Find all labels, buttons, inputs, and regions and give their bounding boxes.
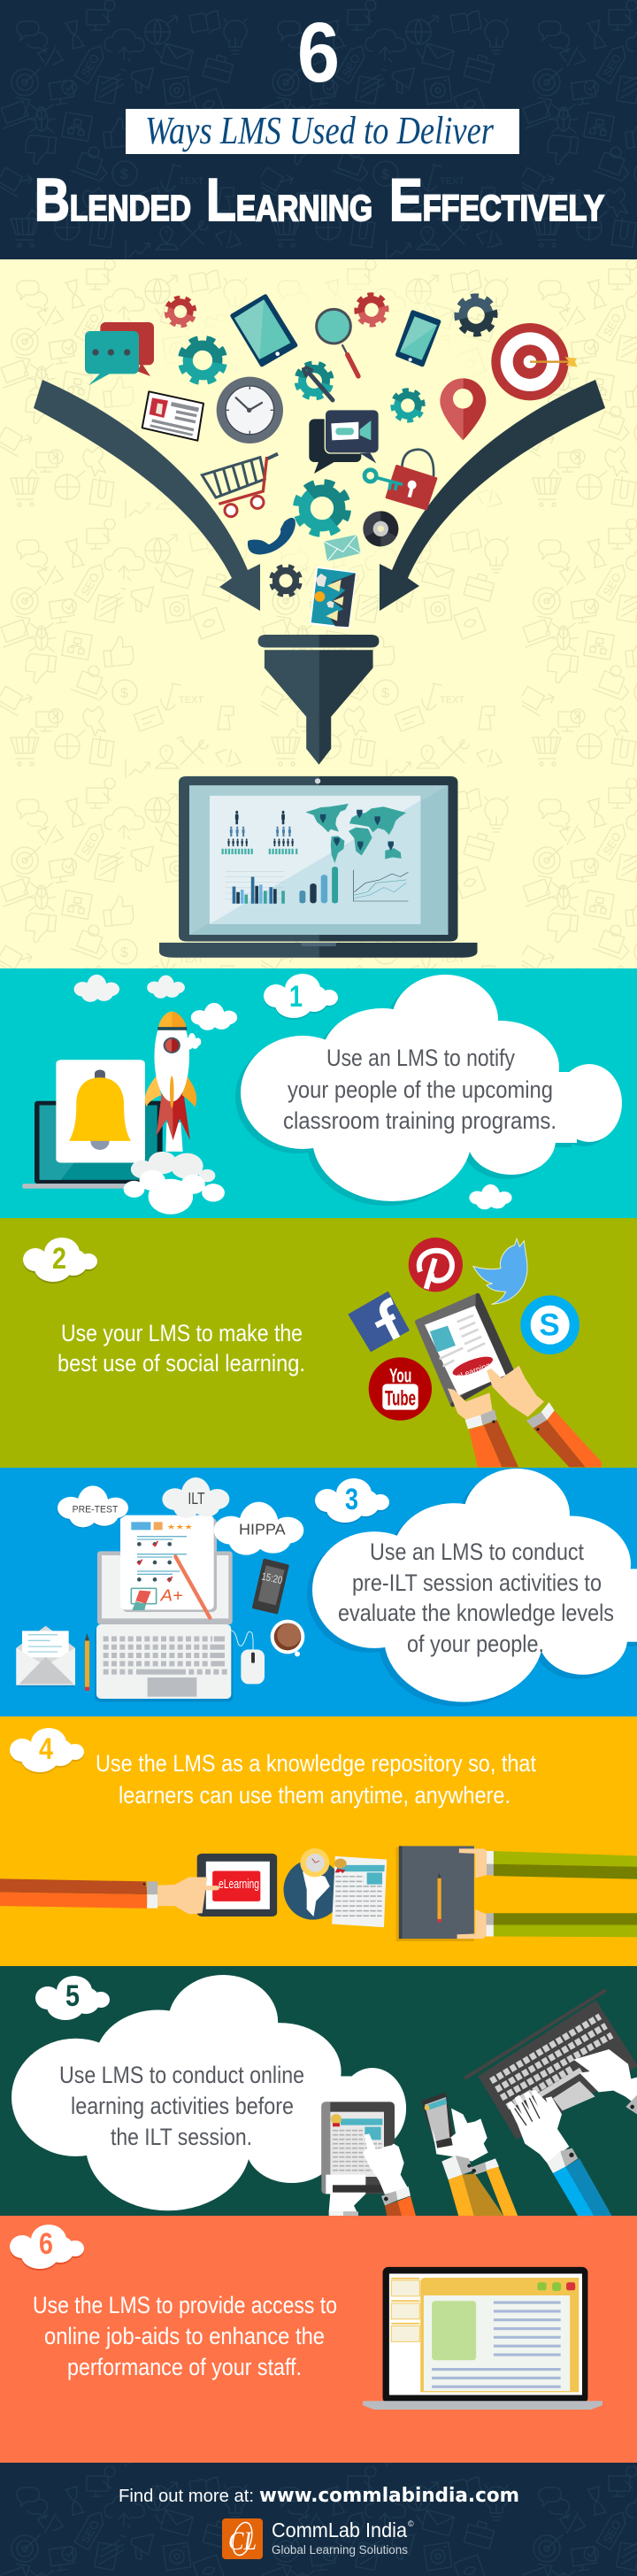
icon: large teal gear — [293, 479, 351, 537]
badge: number 3: 3 — [345, 1483, 358, 1516]
footer panel — [0, 2463, 637, 2576]
arrow: left curved arrow — [34, 380, 260, 611]
icon: video chat — [309, 410, 379, 474]
illustration: social media and tablet — [349, 1238, 602, 1467]
cloud: HIPPA tag — [214, 1502, 303, 1555]
logo: CommLab India mark: CL — [228, 2526, 257, 2556]
header panel — [0, 0, 637, 259]
icon: small dark gear — [269, 564, 303, 598]
cloud: ILT tag — [162, 1477, 229, 1518]
icon: pencil — [85, 1633, 89, 1691]
icon: dark gear top — [453, 292, 499, 338]
icon: Skype — [520, 1295, 579, 1354]
badge: number 1 — [264, 974, 338, 1020]
panel: funnel illustration — [0, 259, 637, 969]
icon: Skype: S — [539, 1307, 560, 1342]
panel: section 6 — [0, 2216, 637, 2463]
icon: teal gear with wrench — [293, 359, 335, 402]
panel: section 2 — [0, 1218, 637, 1468]
cloud: section 3 callout: of your people. — [407, 1631, 544, 1657]
subtitle banner: Ways LMS Used to Deliver — [145, 109, 495, 152]
illustration: phone and hands — [422, 2094, 518, 2216]
logo: CommLab India mark — [222, 2518, 263, 2559]
icon: smartphone — [397, 312, 439, 365]
icon: globe — [284, 1848, 342, 1920]
cloud: section 1 callout: Use an LMS to notify — [326, 1045, 515, 1071]
icons right cluster — [309, 309, 578, 561]
icon: red gear left — [165, 296, 196, 328]
icon: document — [332, 1856, 387, 1927]
badge: number 2: 2 — [52, 1242, 66, 1276]
icon: teal gear left — [178, 335, 227, 385]
chart: people pyramids — [223, 811, 296, 854]
panel: section 5 — [0, 1966, 637, 2216]
text: section 2: best use of social learning. — [58, 1350, 305, 1377]
cloud: section 3 callout — [307, 1469, 637, 1707]
icon: picture card — [310, 567, 357, 629]
illustration: laptop keyboard and hands — [466, 1991, 637, 2216]
icon: target with arrow — [491, 323, 578, 400]
cloud: section 3 callout: pre-ILT session activities to — [352, 1570, 602, 1596]
icon: shopping cart — [202, 454, 278, 517]
text: section 4: Use the LMS as a knowledge repository so, that — [96, 1750, 536, 1777]
icon: mouse — [231, 1631, 265, 1684]
funnel area icons — [159, 518, 478, 958]
cloud: section 1 callout: classroom training programs. — [283, 1107, 556, 1134]
title: Blended Learning Effectively: EFFECTIVELY — [389, 166, 604, 234]
chart: capsule bars — [299, 867, 338, 903]
cloud: section 1 callout — [235, 975, 622, 1206]
text: section 2: Use your LMS to make the — [61, 1320, 303, 1346]
cloud: section 1 callout: your people of the upcoming — [288, 1076, 553, 1103]
icon: map pin — [440, 378, 486, 440]
arm: top right hand — [459, 1848, 637, 1879]
cloud: section 3 callout: Use an LMS to conduct — [370, 1539, 584, 1565]
icon: hand held tablet — [418, 1295, 511, 1405]
icon: envelope and letter — [16, 1626, 75, 1687]
badge: number 5: 5 — [65, 1979, 80, 2013]
footer: find out more line: www.commlabindia.com — [259, 2485, 519, 2507]
icon: Twitter bird — [473, 1238, 527, 1304]
arm: bottom right hand — [457, 1909, 637, 1939]
icon: small teal gear — [390, 388, 426, 423]
badge: number 5 — [35, 1976, 110, 2020]
text: section 6: online job-aids to enhance the — [44, 2323, 325, 2349]
icon: notebook and pencil — [396, 1846, 474, 1941]
title: Blended Learning Effectively: BLENDED — [35, 166, 191, 234]
cloud: ILT tag: ILT — [188, 1489, 205, 1508]
footer: find out more line — [119, 2485, 519, 2507]
chart: world map with pins — [305, 804, 406, 863]
title: Blended Learning Effectively: LEARNING — [206, 166, 372, 234]
cloud: PRE-TEST tag: PRE-TEST — [73, 1504, 118, 1515]
laptop with dashboard — [159, 776, 478, 958]
arrow: right curved arrow — [380, 380, 605, 611]
icon: smartphone with time: 15:20 — [260, 1570, 284, 1586]
icon: YouTube — [369, 1357, 432, 1421]
illustration: laptop and quiz paper — [95, 1516, 233, 1701]
cloud: section 5 callout: learning activities before — [71, 2093, 294, 2119]
illustration: hand tapping tablet — [0, 1854, 277, 1917]
illustration: tablet and hands — [321, 2102, 416, 2216]
text: section 6 — [33, 2292, 337, 2380]
illustration: rocket — [145, 1012, 196, 1152]
badge: number 2 — [23, 1238, 97, 1284]
illustration: laptop and quiz paper: ★★★ — [167, 1523, 193, 1531]
icon: chat bubbles — [85, 322, 154, 385]
panel: section 1 — [0, 968, 637, 1218]
icon: YouTube: Tube — [385, 1386, 416, 1410]
cloud: section 5 callout: the ILT session. — [111, 2124, 252, 2150]
icon: smartphone with time — [254, 1560, 288, 1613]
icon: magnifying glass — [317, 309, 358, 376]
text: section 4: learners can use them anytime, anywhere. — [119, 1782, 510, 1809]
icon: padlock and key — [365, 450, 436, 509]
illustration: rocket smoke — [124, 1152, 225, 1215]
icon: envelope — [324, 535, 361, 561]
cloud: section 5 callout — [12, 1975, 406, 2210]
text: section 6: Use the LMS to provide access to — [33, 2292, 337, 2318]
title: number 6: 6 — [297, 5, 340, 100]
logo: company name and tagline — [272, 2518, 414, 2557]
icon: coffee cup — [271, 1620, 304, 1656]
footer: find out more line: Find out more at: — [119, 2487, 254, 2506]
icon: Pinterest — [409, 1238, 463, 1292]
icon: tablet — [233, 297, 295, 365]
chart: line chart — [353, 870, 408, 901]
icon: red gear top — [353, 291, 390, 328]
illustration: laptop with window — [363, 2267, 602, 2410]
cloud: PRE-TEST tag — [57, 1485, 128, 1529]
logo: company name and tagline: CommLab India — [272, 2518, 407, 2541]
icon: Facebook — [349, 1292, 409, 1351]
illustration: laptop and quiz paper: A+ — [160, 1585, 183, 1604]
icon: id card — [142, 391, 203, 441]
icon: clock — [217, 377, 283, 443]
logo: company name and tagline: © — [408, 2519, 414, 2528]
icon: disc — [363, 511, 398, 546]
badge: number 4 — [10, 1728, 84, 1774]
small decorative clouds — [74, 975, 512, 1209]
icons left cluster — [85, 297, 295, 517]
cloud: HIPPA tag: HIPPA — [239, 1520, 286, 1538]
hand: right hand and sleeve — [487, 1366, 602, 1467]
hand: left hand and sleeve — [448, 1388, 518, 1467]
panel: section 4 — [0, 1716, 637, 1966]
text: section 2 — [58, 1320, 305, 1377]
text: section 4 — [96, 1750, 536, 1809]
badge: number 1: 1 — [289, 980, 303, 1014]
panel: section 3 — [0, 1468, 637, 1716]
icon: hand held tablet: eLearning — [456, 1361, 492, 1381]
badge: number 6: 6 — [39, 2227, 53, 2261]
logo: company name and tagline: Global Learning Solutions — [272, 2542, 408, 2557]
text: section 6: performance of your staff. — [67, 2354, 302, 2380]
cloud: section 5 callout: Use LMS to conduct online — [59, 2062, 304, 2088]
badge: number 6 — [10, 2225, 84, 2271]
chart: bar chart — [226, 871, 284, 904]
funnel — [258, 635, 379, 765]
badge: number 3 — [315, 1478, 389, 1524]
label: eLearning on tablet: eLearning — [219, 1877, 259, 1892]
illustration: laptop with bell — [22, 1060, 163, 1189]
title: Blended Learning Effectively — [35, 166, 604, 234]
badge: number 4: 4 — [39, 1732, 53, 1766]
icon: telephone handset — [248, 518, 295, 554]
icon: YouTube: You — [389, 1365, 411, 1387]
